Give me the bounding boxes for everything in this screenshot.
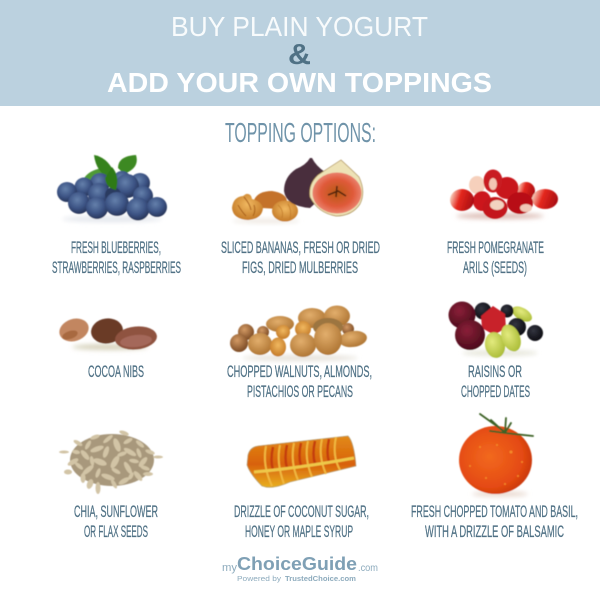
label: raisins: RAISINS OR: [468, 362, 522, 381]
label: honey: [234, 502, 369, 541]
icon: cocoa nibs: [56, 315, 158, 352]
label: seeds: [74, 502, 158, 541]
label: pomegranate: [447, 238, 544, 277]
footer logo: ChoiceGuide: [237, 554, 357, 574]
label: figs: SLICED BANANAS, FRESH OR DRIED: [221, 238, 380, 257]
icon: figs: [232, 158, 363, 223]
icon: seeds pile: [59, 429, 163, 494]
icon: honeycomb: [247, 436, 356, 487]
label: pomegranate: ARILS (SEEDS): [463, 258, 527, 277]
footer logo: TrustedChoice.com: [285, 576, 356, 583]
header banner: [0, 0, 600, 106]
footer logo: my: [222, 562, 238, 574]
ampersand: &: [288, 39, 311, 71]
footer logo: [222, 554, 378, 583]
icon: pomegranate arils: [450, 170, 558, 219]
label: honey: DRIZZLE OF COCONUT SUGAR,: [234, 502, 369, 521]
label: nuts: [227, 362, 372, 401]
label: blueberries: [52, 238, 181, 277]
icon: raisins: [448, 302, 543, 360]
label: honey: HONEY OR MAPLE SYRUP: [245, 522, 353, 541]
icon: mixed nuts: [230, 306, 368, 361]
label: figs: [221, 238, 380, 277]
icon: tomato: [459, 414, 533, 497]
label: seeds: OR FLAX SEEDS: [84, 522, 148, 541]
footer logo: .com: [358, 563, 378, 574]
icon: blueberries with mint: [57, 155, 167, 222]
label: blueberries: FRESH BLUEBERRIES,: [71, 238, 161, 257]
label: nuts: CHOPPED WALNUTS, ALMONDS,: [227, 362, 372, 381]
label: nuts: PISTACHIOS OR PECANS: [247, 382, 353, 401]
title line: add your own toppings: ADD YOUR OWN TOPPINGS: [107, 67, 492, 98]
text: STRAWBERRIES, RASPBERRIES: [52, 258, 181, 277]
footer logo: Powered by: [237, 576, 282, 583]
label: figs: FIGS, DRIED MULBERRIES: [242, 258, 358, 277]
section heading: topping options: TOPPING OPTIONS:: [225, 117, 376, 148]
title line: buy plain yogurt: BUY PLAIN YOGURT: [171, 11, 428, 42]
label: cocoa nibs: COCOA NIBS: [88, 362, 144, 381]
label: raisins: [461, 362, 530, 401]
label: tomato: [411, 502, 578, 541]
label: seeds: CHIA, SUNFLOWER: [74, 502, 158, 521]
